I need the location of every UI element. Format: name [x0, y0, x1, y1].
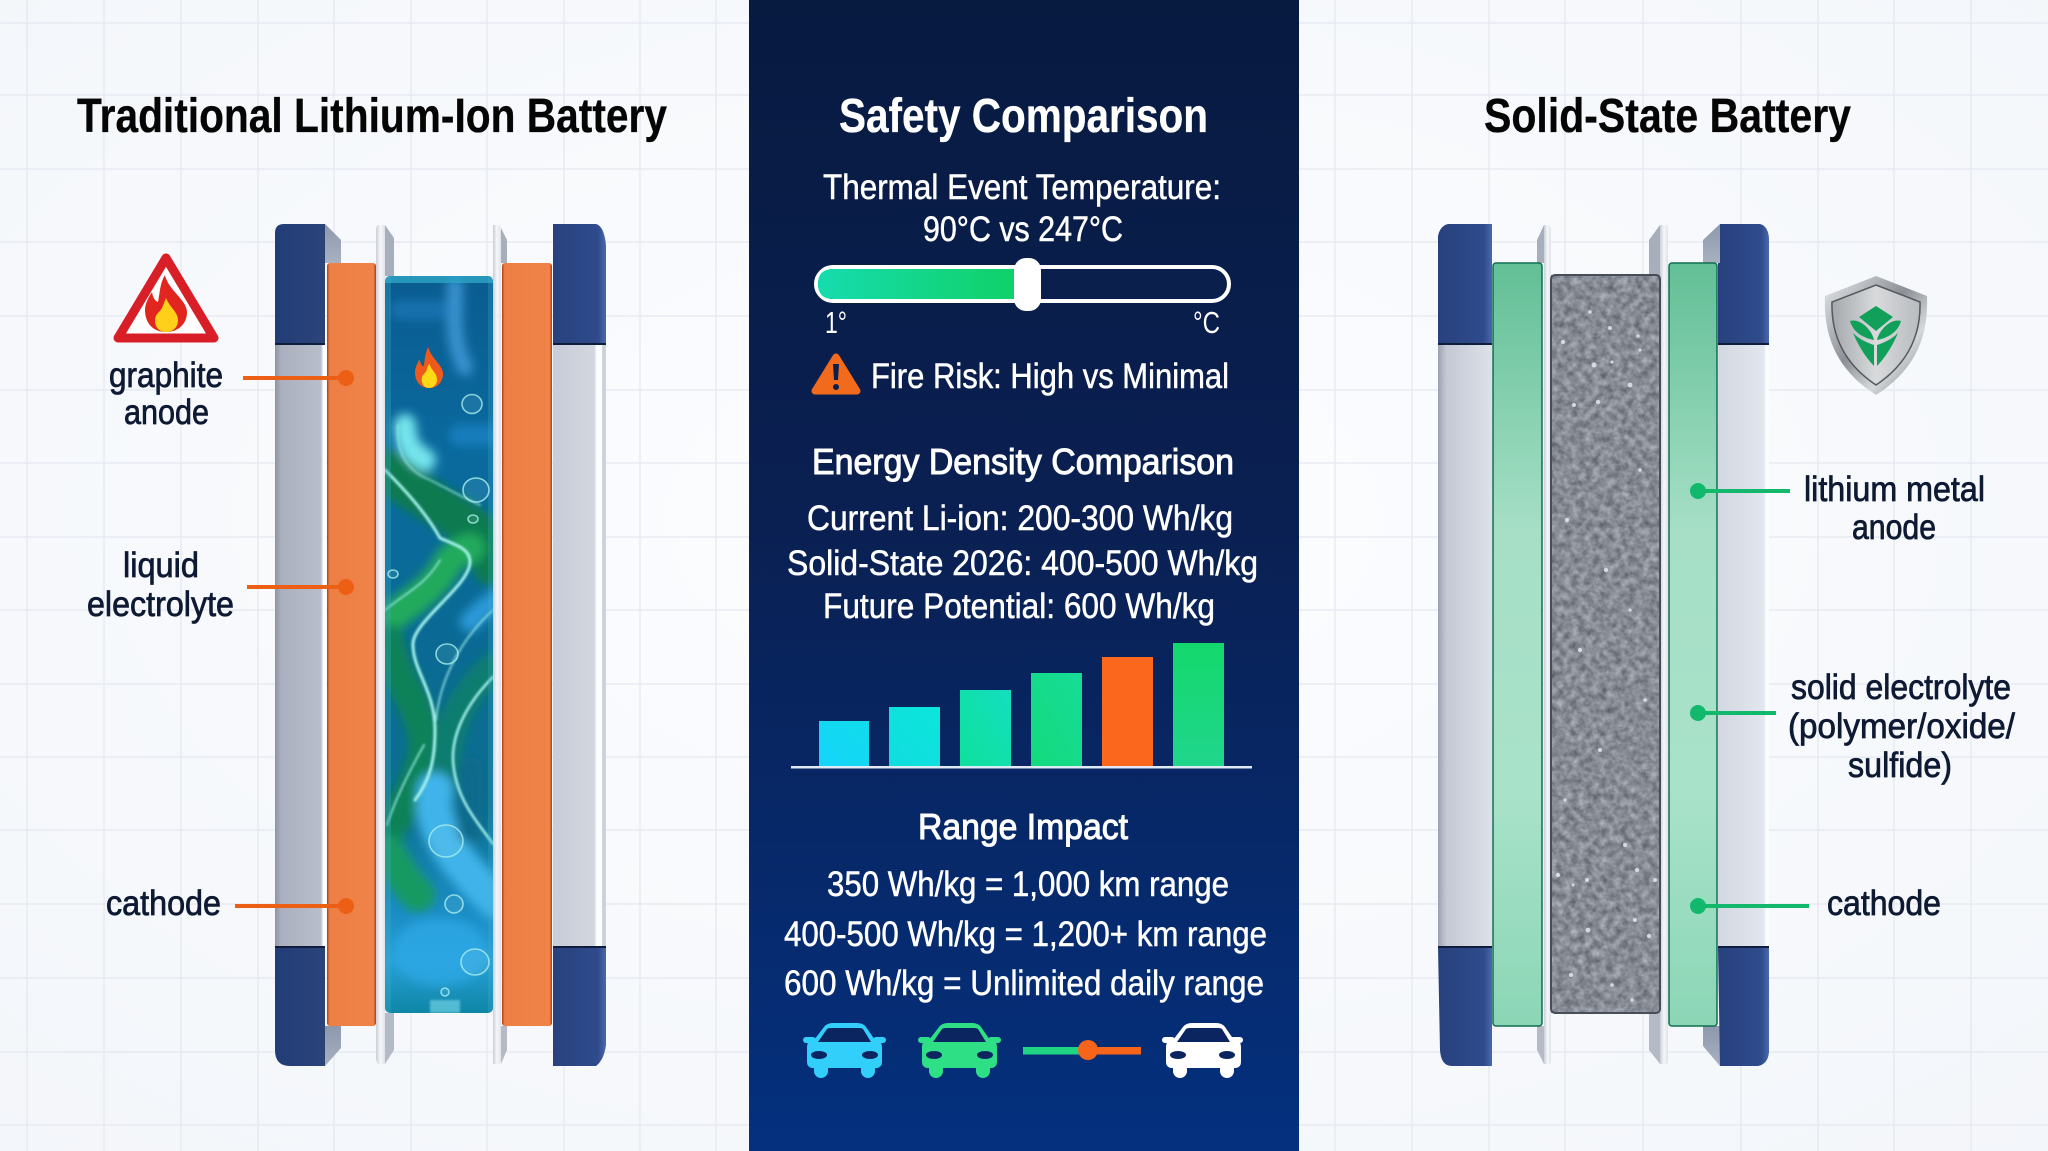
range figures: [784, 865, 1267, 1003]
right casing: [553, 224, 606, 1066]
left separator plate: [1537, 225, 1551, 1064]
callout: solid electrolyte: sulfide): [1848, 746, 1952, 785]
callout: cathode right: [1690, 884, 1941, 923]
energy density figures: Current Li-ion: 200-300 Wh/kg: [807, 499, 1233, 538]
left casing: [275, 224, 341, 1066]
icon: green car: [918, 1023, 1001, 1078]
panel: solid-state battery diagram: [1438, 224, 1769, 1066]
title: traditional lithium-ion battery: Traditional Lithium-Ion Battery: [77, 90, 667, 143]
heading: energy density comparison: Energy Density Comparison: [812, 441, 1234, 482]
right separator plate: [1649, 225, 1668, 1064]
left casing: [1438, 224, 1492, 1066]
fire risk warning: Fire Risk: High vs Minimal: [871, 357, 1229, 396]
callout: liquid electrolyte: liquid: [123, 546, 199, 585]
title: solid-state battery: Solid-State Battery: [1484, 90, 1851, 143]
callout: cathode left: cathode: [106, 884, 221, 923]
callout: liquid electrolyte: [87, 546, 354, 624]
temperature slider: [816, 258, 1229, 340]
callout: graphite anode: graphite: [109, 356, 223, 395]
temperature slider: °C: [1193, 305, 1220, 340]
cathode layer: green: [1669, 263, 1717, 1026]
temperature slider: 1°: [825, 305, 847, 340]
icon: fire hazard triangle: [118, 258, 214, 338]
callout: solid electrolyte: [1690, 668, 2015, 785]
energy density figures: Future Potential: 600 Wh/kg: [823, 587, 1215, 626]
solid electrolyte core: [1551, 275, 1660, 1013]
callout: solid electrolyte: (polymer/oxide/: [1788, 707, 2015, 746]
bubbles: [388, 394, 489, 996]
section: thermal event temperature: 90°C vs 247°C: [923, 210, 1123, 249]
range figures: 350 Wh/kg = 1,000 km range: [827, 865, 1229, 904]
section: thermal event temperature: Thermal Event Temperature:: [823, 168, 1221, 207]
icon: flame in electrolyte: [415, 347, 443, 388]
bar chart: energy density: [791, 643, 1252, 768]
range figures: 400-500 Wh/kg = 1,200+ km range: [784, 915, 1267, 954]
callout: graphite anode: [109, 356, 354, 432]
icon: blue car: [803, 1023, 886, 1078]
energy density figures: Solid-State 2026: 400-500 Wh/kg: [787, 544, 1258, 583]
anode layer: orange: [327, 263, 376, 1026]
range figures: 600 Wh/kg = Unlimited daily range: [784, 964, 1264, 1003]
liquid electrolyte: [385, 276, 495, 1013]
title: safety comparison: Safety Comparison: [839, 90, 1208, 143]
energy density figures: [787, 499, 1258, 626]
range progress indicator: [1023, 1040, 1141, 1060]
panel: lithium-ion battery diagram: [275, 224, 606, 1066]
panel: center comparison background: [749, 0, 1299, 1151]
right casing: [1703, 224, 1769, 1066]
section: thermal event temperature: [823, 168, 1221, 249]
cathode layer: orange: [502, 263, 552, 1026]
icon: white car: [1162, 1023, 1243, 1078]
heading: range impact: Range Impact: [918, 806, 1128, 847]
callout: liquid electrolyte: electrolyte: [87, 585, 234, 624]
callout: cathode right: cathode: [1827, 884, 1941, 923]
icon: safety shield: [1825, 276, 1927, 395]
callout: solid electrolyte: solid electrolyte: [1791, 668, 2011, 707]
callout: lithium metal anode: lithium metal: [1804, 470, 1985, 509]
callout: lithium metal anode: [1690, 470, 1985, 547]
callout: graphite anode: anode: [124, 393, 209, 432]
anode layer: green: [1493, 263, 1542, 1026]
callout: lithium metal anode: anode: [1852, 508, 1936, 547]
right separator plate: [493, 225, 507, 1064]
callout: cathode left: [106, 884, 354, 923]
left separator plate: [376, 225, 394, 1064]
